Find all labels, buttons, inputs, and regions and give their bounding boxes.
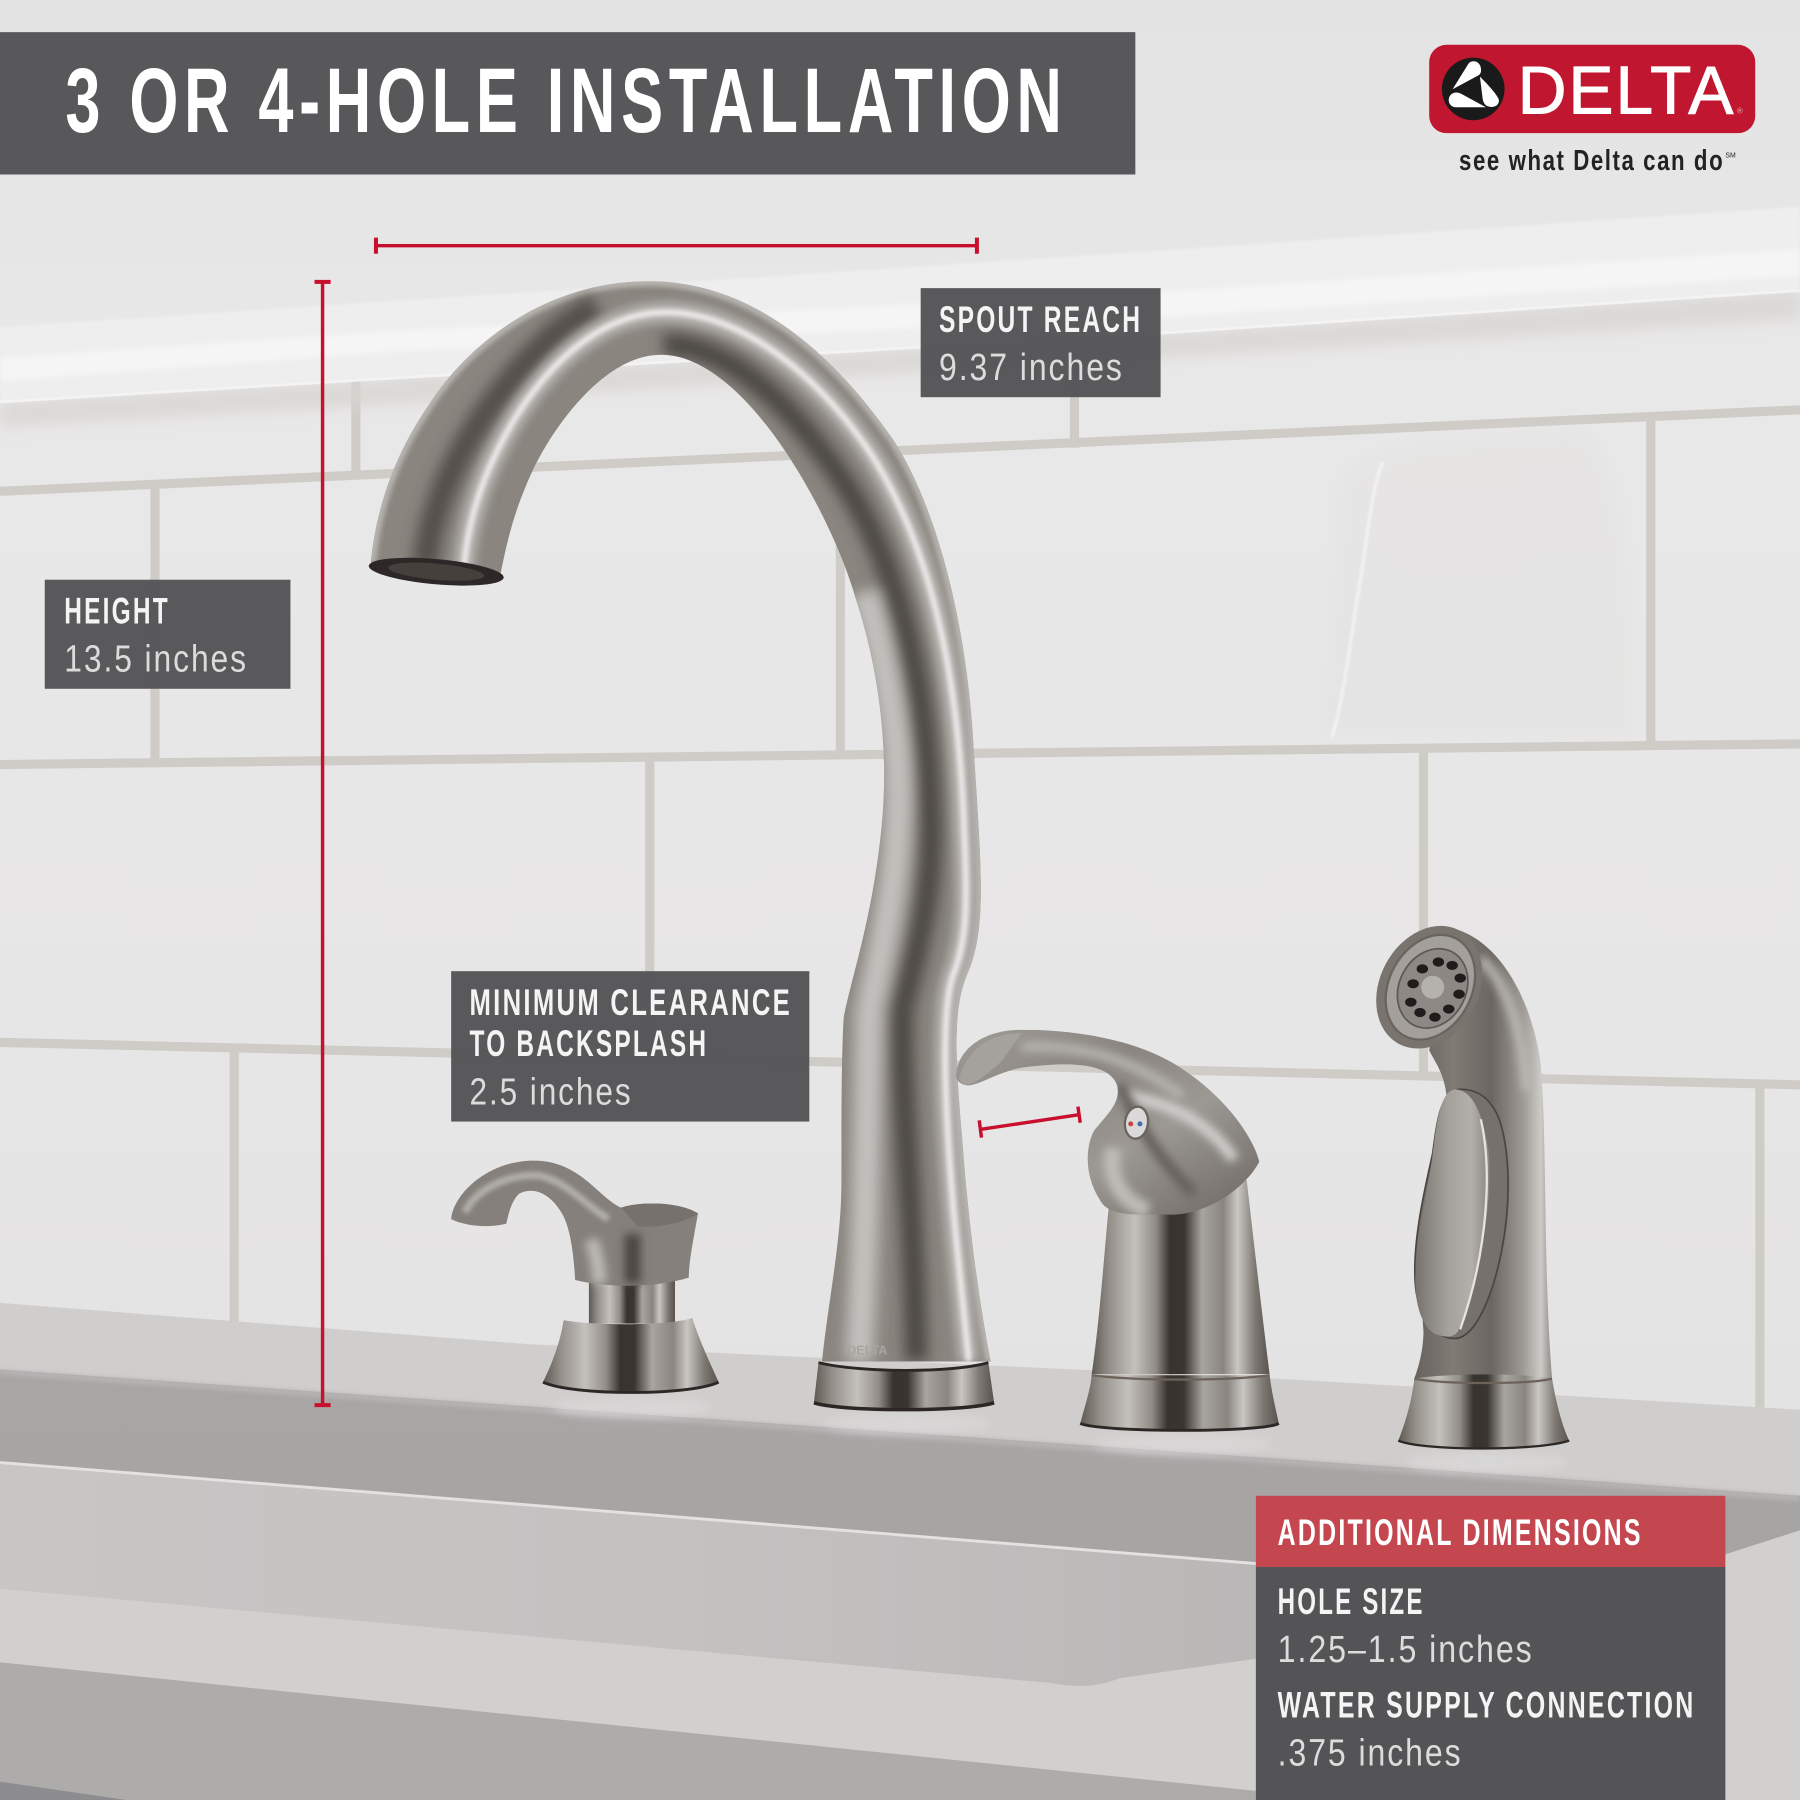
callout: spout reach: SPOUT REACH [939,299,1142,340]
crown moulding [0,207,1800,402]
logo: Delta: SM [1725,152,1736,159]
sprayer trigger [1415,1089,1490,1337]
callout: spout reach [921,288,1161,397]
callout: minimum clearance: MINIMUM CLEARANCE [470,982,792,1023]
callout: height: 13.5 inches [64,639,248,681]
title banner: 3 OR 4-HOLE INSTALLATION [65,50,1068,152]
logo mark [1442,58,1505,120]
hole size: 1.25–1.5 inches [1278,1629,1534,1671]
callout: minimum clearance: TO BACKSPLASH [470,1023,708,1064]
moulding shadow [0,290,1800,427]
arrow: height dimension line [315,281,331,1405]
single-handle lever [947,1022,1279,1430]
sink basin wall [0,1462,1256,1686]
callout: spout reach: 9.37 inches [939,347,1124,389]
title banner [0,32,1135,174]
nozzle aerator [368,553,505,590]
spout tube [344,264,1010,1378]
base reflections on counter [551,1397,1567,1473]
sprayer head [1355,907,1503,1067]
sprayer body [1414,930,1552,1378]
dispenser stem [589,1278,675,1324]
engraved brand: DELTA [847,1344,887,1358]
hole size: HOLE SIZE [1278,1581,1425,1622]
arrow: clearance dimension line [979,1107,1080,1138]
water supply connection: .375 inches [1278,1733,1462,1775]
logo wordmark: DELTA [1518,54,1734,129]
moulding highlight [0,249,1800,381]
basin top edge line [0,1462,1256,1564]
handle body [1092,1180,1270,1374]
callout: minimum clearance [451,971,809,1122]
callout: height: HEIGHT [64,590,170,631]
grout lines [0,333,1800,1412]
soap dispenser [451,1161,719,1392]
bottom dark corner [0,1782,126,1800]
tagline: see what Delta can do [1459,145,1724,177]
hot/cold indicator [1123,1105,1150,1140]
callout: height [45,580,290,689]
side sprayer [1376,926,1570,1450]
logo: Delta: ® [1737,107,1743,116]
main faucet [344,264,1010,1410]
logo: Delta [1429,45,1755,177]
dispenser head [451,1161,698,1286]
sink rim light surface [0,1462,1800,1800]
dispenser base [543,1318,719,1392]
panel: additional dimensions [1256,1496,1725,1800]
callout: minimum clearance: 2.5 inches [470,1071,633,1113]
panel header [1256,1496,1725,1567]
countertop surface [0,1303,1800,1504]
arrow: spout reach dimension line [375,238,977,254]
lever dome [956,1030,1260,1215]
tile reflection [1320,430,1632,737]
lower sink surface [0,1662,1256,1800]
hole size [1278,1581,1534,1671]
counter front edge highlight [0,1372,1800,1498]
logo badge [1429,45,1755,133]
handle base ring [1080,1375,1279,1430]
panel heading: ADDITIONAL DIMENSIONS [1278,1512,1643,1553]
sprayer trigger recess [1415,1089,1508,1339]
base ring [814,1363,994,1410]
panel body [1256,1567,1725,1800]
water supply connection [1278,1684,1696,1775]
sprayer base [1398,1374,1569,1448]
